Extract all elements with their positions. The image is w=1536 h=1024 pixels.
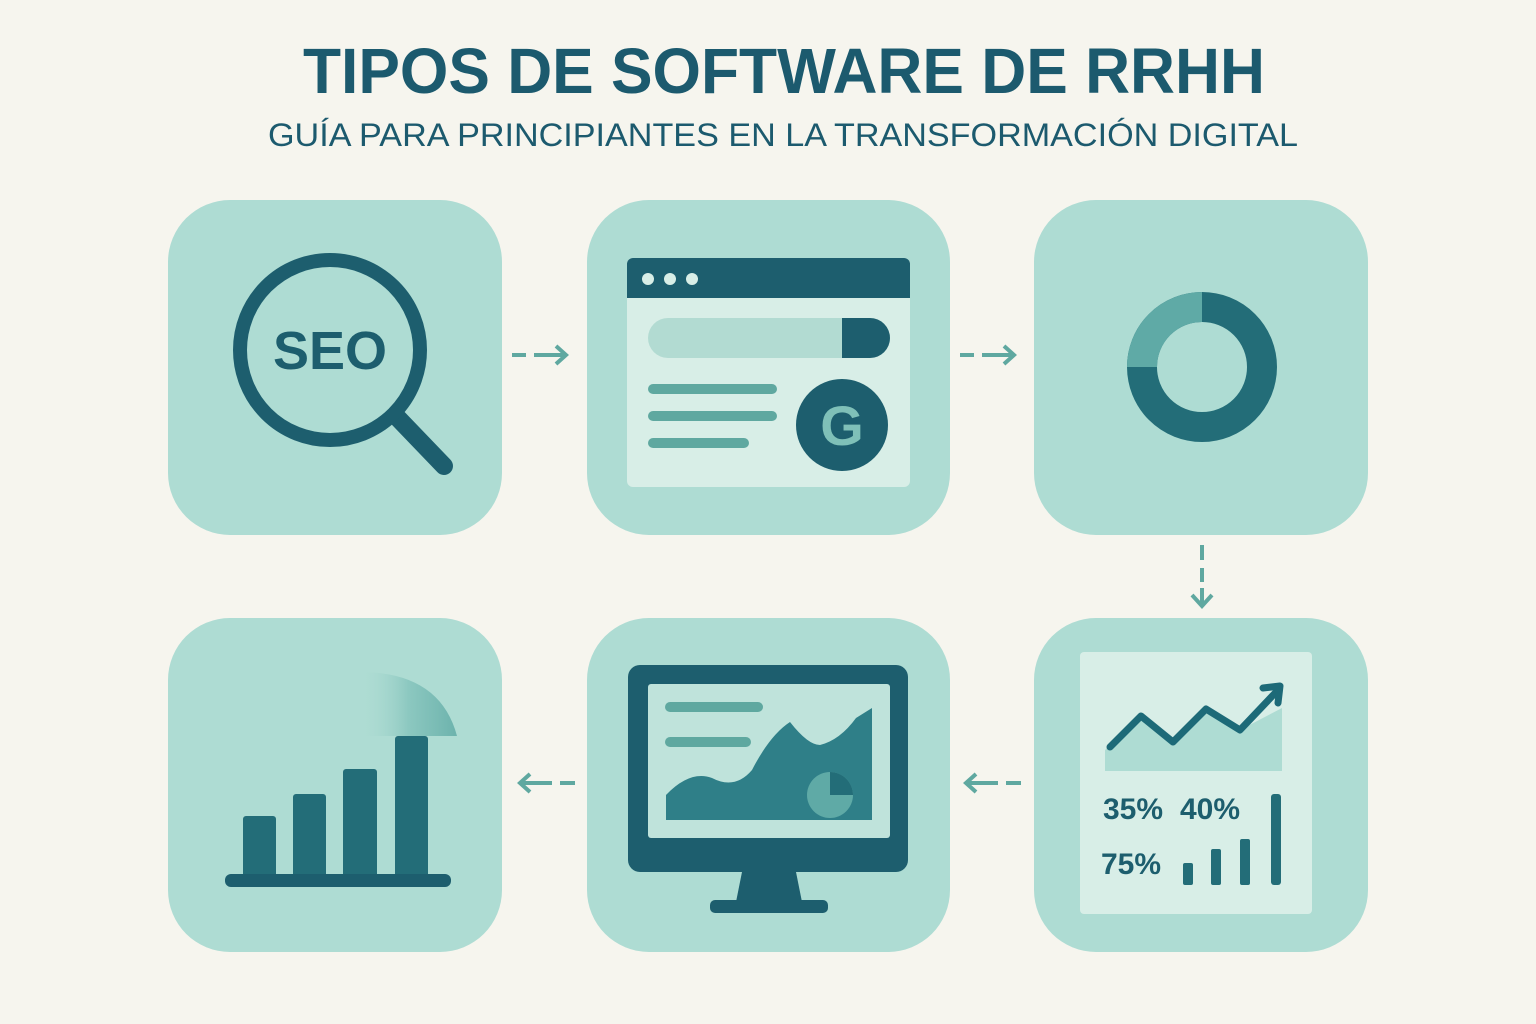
report sheet xyxy=(1080,652,1312,914)
icon: donut chart xyxy=(1127,292,1262,427)
icon: quarter shape xyxy=(360,672,457,736)
stats: 35% xyxy=(1103,793,1163,826)
panel: donut xyxy=(1034,200,1368,535)
panel: SEO xyxy=(168,200,502,535)
panel: analytics report xyxy=(1034,618,1368,952)
arrow: 2 to 3 xyxy=(960,346,1014,364)
arrow: 5 to 4 xyxy=(520,774,575,792)
mini bars xyxy=(1183,794,1281,885)
arrow: 1 to 2 xyxy=(512,346,566,364)
icon: monitor xyxy=(628,665,908,913)
icon: bar chart xyxy=(225,736,451,887)
panel: bar chart growth xyxy=(168,618,502,952)
icon: browser window xyxy=(627,258,910,487)
icon: magnifier xyxy=(240,260,444,466)
line chart xyxy=(1105,686,1282,771)
title: TIPOS DE SOFTWARE DE RRHH xyxy=(303,35,1265,107)
icon: magnifier: SEO xyxy=(273,321,387,381)
icon: browser window: G xyxy=(820,394,864,457)
arrow: 6 to 5 xyxy=(966,774,1021,792)
subtitle: GUÍA PARA PRINCIPIANTES EN LA TRANSFORMACIÓN DIGITAL xyxy=(268,117,1298,153)
stats: 75% xyxy=(1101,848,1161,881)
stats xyxy=(1101,793,1240,881)
panel: monitor dashboard xyxy=(587,618,950,952)
stats: 40% xyxy=(1180,793,1240,826)
arrow: 3 down to 6 xyxy=(1192,545,1212,606)
panel: search browser xyxy=(587,200,950,535)
